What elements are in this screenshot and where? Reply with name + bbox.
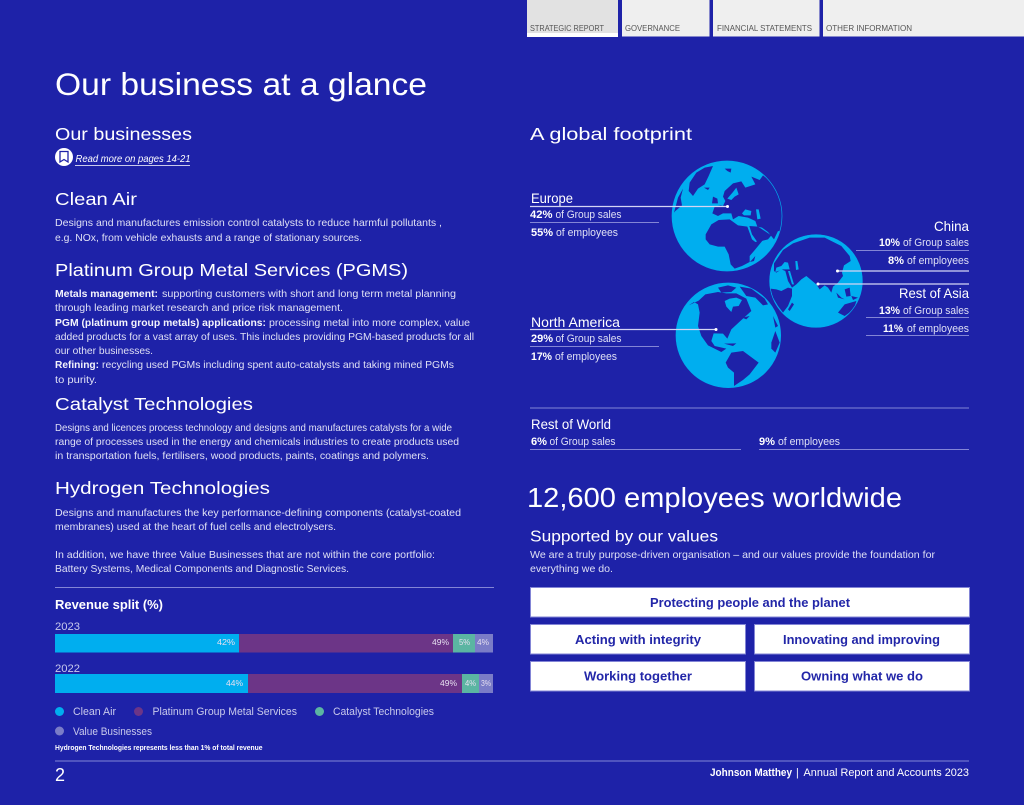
footer: report name [710,767,969,779]
callout: rest of world: Rest of World [531,416,611,432]
callout: north america: of Group sales [556,333,622,345]
value: owning what we do [754,662,970,691]
callout: rest of world: of employees [778,436,840,448]
tab: other information: OTHER INFORMATION [826,23,912,33]
callout: north america: North America [531,314,620,330]
callout: rest of asia: 11% [883,323,904,335]
section: platinum group metal services: processing metal into more complex, value [269,318,470,329]
tab: financial statements: FINANCIAL STATEMENTS [717,23,812,33]
bar: 2022: 44% [226,679,243,688]
value: working together: Working together [584,668,692,684]
callout: europe: of Group sales [556,209,622,221]
globe: europe and africa [672,161,783,271]
values intro text: We are a truly purpose-driven organisation – and our values provide the foundation for [530,550,936,561]
tab: governance [622,0,710,36]
bar: 2022: 2022 [55,663,80,675]
callout: north america: of employees [555,351,617,363]
callout: rest of asia: 13% [879,305,901,317]
callout: china: China [934,218,969,234]
section: hydrogen technologies: Battery Systems, Medical Components and Diagnostic Services. [55,564,349,575]
value: acting with integrity [530,624,746,654]
section: platinum group metal services [55,260,474,386]
section: platinum group metal services: recycling used PGMs including spent auto-catalysts and taking mined PGMs [102,360,454,371]
bar: 2022 [55,663,493,693]
bar: 2022: 4% [465,679,476,688]
heading: supported by our values: Supported by our values [530,528,718,546]
section: hydrogen technologies: Hydrogen Technologies [55,478,270,498]
section: platinum group metal services: to purity. [55,375,97,386]
bar: 2022: 3% [481,679,491,688]
section: platinum group metal services: PGM (platinum group metals) applications: [55,318,266,329]
section: clean air: Clean Air [55,189,137,209]
callout: north america [530,314,718,363]
globe: americas [676,283,781,388]
callout: europe: 42% [530,209,553,221]
values intro text: everything we do. [530,564,613,575]
bar: 2023: 42% [217,638,235,647]
value: innovating and improving: Innovating and improving [783,632,940,647]
legend: Platinum Group Metal Services [152,706,297,718]
value: protecting people and the planet: Protecting people and the planet [650,595,851,610]
bar: 2022: 49% [440,679,457,688]
callout: north america: 17% [531,351,553,363]
callout: europe [530,190,729,239]
section: platinum group metal services: supporting customers with short and long term metal planning [162,289,456,300]
callout: rest of world: of Group sales [550,436,616,448]
tab: financial statements [713,0,820,36]
page number: 2 [55,765,65,785]
section: clean air: Designs and manufactures emission control catalysts to reduce harmful pollutants , [55,218,442,229]
callout: north america: 29% [531,333,554,345]
section: clean air [55,189,442,244]
section: platinum group metal services: Refining: [55,360,99,371]
tab: other information [823,0,1024,36]
globe: asia [770,235,862,327]
section: platinum group metal services: Metals management: [55,289,158,300]
chart: revenue split: Revenue split (%) [55,597,163,612]
section: catalyst technologies: in transportation fuels, fertilisers, wood products, paints, coatings and polymers. [55,451,429,462]
callout: rest of world: 9% [759,436,776,448]
section: hydrogen technologies [55,478,461,575]
callout: china: of Group sales [903,237,969,249]
callout: rest of world: 6% [531,436,548,448]
section: hydrogen technologies: membranes) used at the heart of fuel cells and electrolysers. [55,522,336,533]
value: owning what we do: Owning what we do [801,668,923,684]
bar: 2023: 2023 [55,621,80,633]
value: acting with integrity: Acting with integrity [575,632,702,647]
callout: china: 10% [879,237,901,249]
value: protecting people and the planet [530,588,970,617]
section: catalyst technologies: Catalyst Technologies [55,394,253,414]
bar: 2023: 49% [432,638,449,647]
read more link: Read more on pages 14-21 [76,154,190,165]
callout: europe: 55% [531,227,554,239]
section: catalyst technologies: Designs and licences process technology and designs and manufactures catalysts for a wide [55,423,452,434]
read more link [55,148,190,166]
callout: europe: Europe [531,190,573,206]
section: catalyst technologies: range of processes used in the energy and chemicals industries to create products used [55,437,459,448]
bar: 2023: 4% [477,638,489,647]
callout: europe: of employees [556,227,618,239]
section: platinum group metal services: through leading market research and price risk management. [55,303,343,314]
section: platinum group metal services: our other businesses. [55,346,153,357]
legend: Catalyst Technologies [333,706,434,718]
icon: book [55,148,73,166]
section: hydrogen technologies: In addition, we have three Value Businesses that are not within the core portfolio: [55,550,435,561]
callout: rest of asia [816,282,969,336]
legend: Clean Air [73,706,116,718]
headline stat: employees: 12,600 employees worldwide [527,482,902,513]
callout: rest of asia: Rest of Asia [899,285,969,301]
section: clean air: e.g. NOx, from vehicle exhausts and a range of stationary sources. [55,233,362,244]
value: innovating and improving [754,624,970,654]
navigation tabs [527,0,1024,37]
section: platinum group metal services: Platinum Group Metal Services (PGMS) [55,260,408,280]
footnote: Hydrogen Technologies represents less than 1% of total revenue [55,745,263,752]
value: working together [530,662,746,691]
callout: china: of employees [907,255,969,267]
chart: revenue split [55,597,493,752]
tab: governance: GOVERNANCE [625,23,680,33]
callout: rest of asia: of Group sales [903,305,969,317]
section: catalyst technologies [55,394,459,462]
callout: china [836,218,969,272]
callout: china: 8% [888,255,905,267]
footer: report name: Annual Report and Accounts 2023 [804,767,969,779]
bar: 2023 [55,621,493,652]
footer: report name: Johnson Matthey [710,767,792,779]
bar: 2023: 5% [459,638,470,647]
legend [55,706,434,738]
heading: our businesses: Our businesses [55,124,192,144]
legend: Value Businesses [73,726,152,738]
footer: report name: | [796,767,799,779]
title: Our business at a glance [55,66,427,102]
callout: rest of asia: of employees [907,323,969,335]
tab: strategic report: STRATEGIC REPORT [530,23,604,33]
heading: a global footprint: A global footprint [530,124,692,144]
tab: strategic report [527,0,618,37]
section: platinum group metal services: added products for a vast array of uses. This includes providing PGM-based products for all [55,332,474,343]
callout: rest of world [530,416,969,450]
section: hydrogen technologies: Designs and manufactures the key performance-defining components (catalyst-coated [55,508,461,519]
values intro text [530,550,936,575]
